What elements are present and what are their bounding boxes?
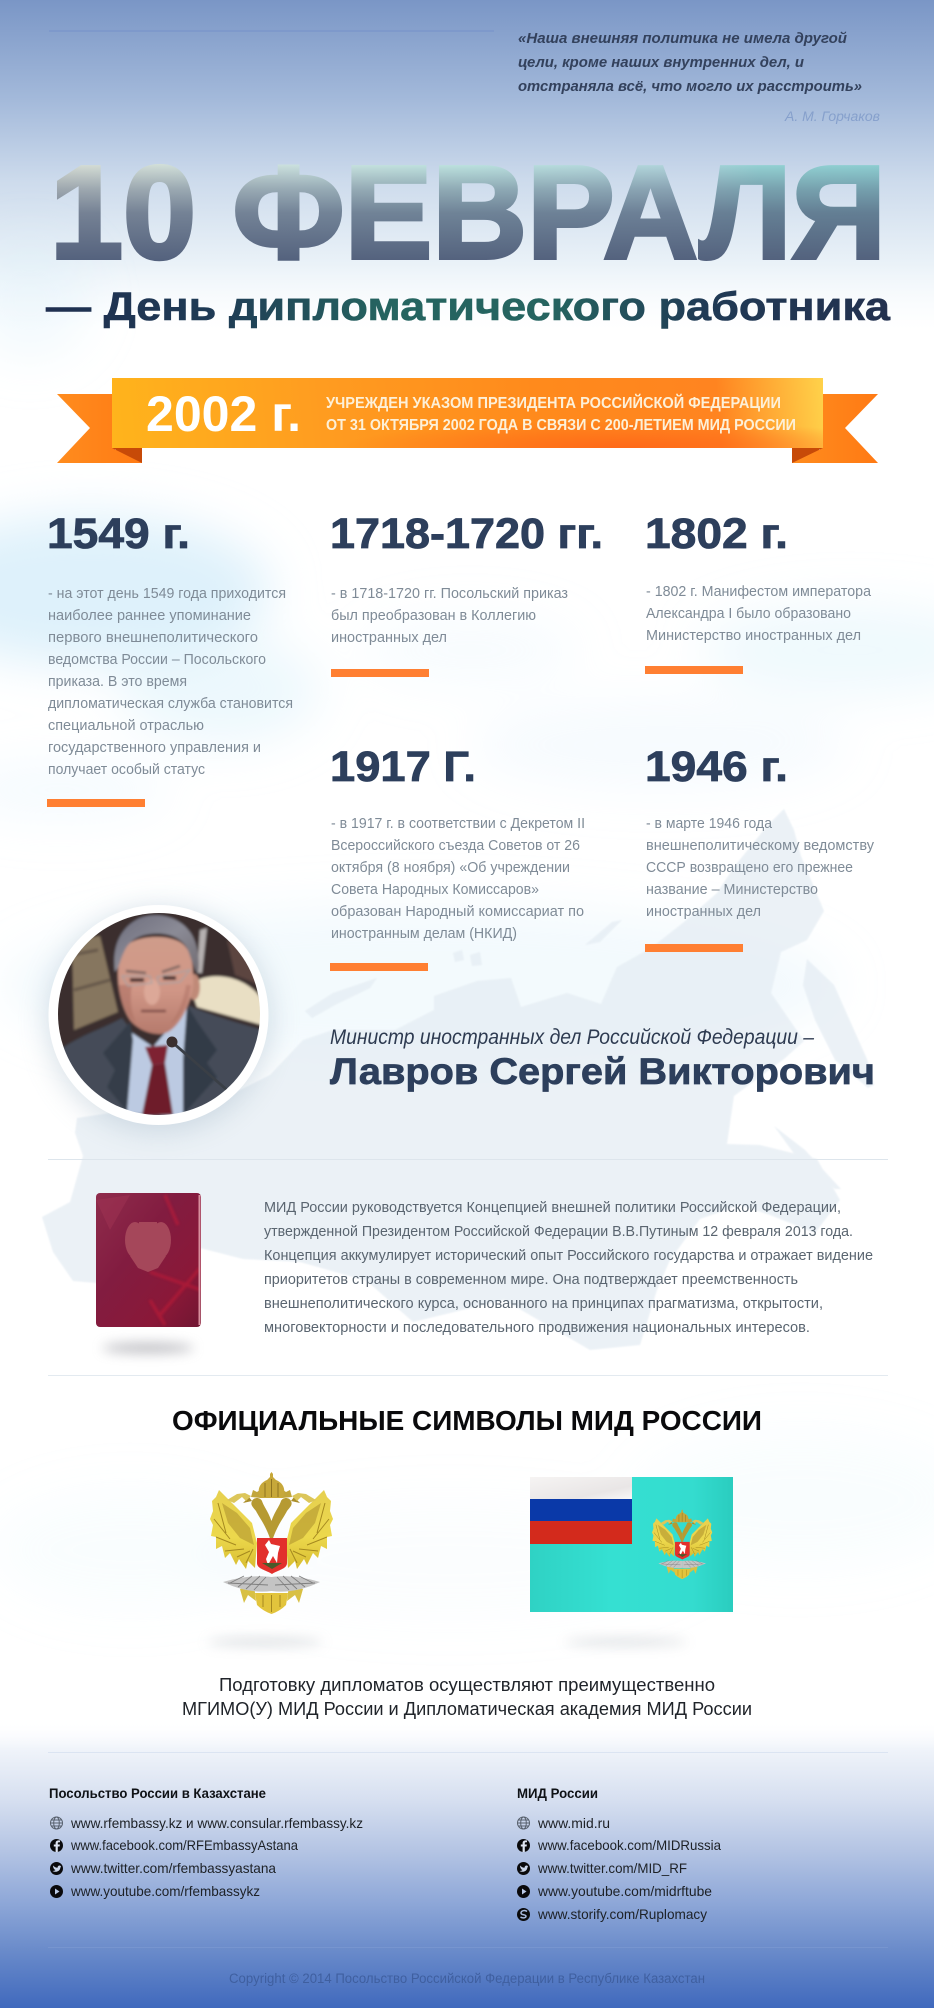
title: 10 ФЕВРАЛЯ: [50, 139, 886, 286]
diplomats note: МГИМО(У) МИД России и Дипломатическая академия МИД России: [182, 1699, 752, 1719]
quote: отстраняла всё, что могло их расстроить»: [518, 79, 862, 95]
diplomats note: Подготовку дипломатов осуществляют преимущественно: [219, 1675, 715, 1695]
timeline: 1549: приказа. В это время: [48, 674, 187, 690]
timeline: 1917: - в 1917 г. в соответствии с Декретом II: [331, 816, 585, 832]
minister name: Лавров Сергей Викторович: [330, 1051, 875, 1092]
background: map of Russia: [42, 809, 874, 1350]
footer column: ministry: www.mid.ru: [537, 1816, 610, 1831]
timeline: 1549: 1549 г.: [47, 510, 190, 558]
timeline: 1946: название – Министерство: [646, 882, 818, 898]
timeline: 1946: 1946 г.: [645, 743, 788, 791]
timeline: 1718-1720: [330, 510, 603, 677]
timeline: 1917: иностранным делам (НКИД): [331, 926, 517, 942]
icon: storify: [517, 1908, 530, 1921]
timeline: 1917: Всероссийского съезда Советов от 26: [331, 838, 580, 854]
quote: [518, 31, 862, 95]
timeline: 1718-1720: 1718-1720 гг.: [330, 510, 603, 558]
icon: youtube: [50, 1885, 63, 1898]
flag of the ministry: [530, 1477, 733, 1646]
timeline: 1549: - на этот день 1549 года приходится: [48, 586, 286, 602]
timeline: 1549: первого внешнеполитического: [48, 630, 258, 646]
footer column: embassy: [49, 1786, 363, 1899]
timeline: 1549: специальной отраслью: [48, 718, 204, 734]
timeline: 1917: октября (8 ноября) «Об учреждении: [331, 860, 570, 876]
icon: globe: [50, 1817, 62, 1829]
subtitle: — День дипломатического работника: [46, 285, 891, 329]
ribbon text: УЧРЕЖДЕН УКАЗОМ ПРЕЗИДЕНТА РОССИЙСКОЙ ФЕДЕРАЦИИ: [326, 393, 781, 412]
timeline: 1549: ведомства России – Посольского: [48, 652, 266, 668]
portrait of the minister: [47, 905, 271, 1132]
timeline: 1549: наиболее раннее упоминание: [48, 608, 251, 624]
ribbon banner: [57, 378, 878, 463]
timeline: 1946: внешнеполитическому ведомству: [646, 838, 875, 854]
timeline: 1946: иностранных дел: [646, 904, 761, 920]
ribbon text: ОТ 31 ОКТЯБРЯ 2002 ГОДА В СВЯЗИ С 200-ЛЕТИЕМ МИД РОССИИ: [326, 417, 796, 434]
timeline: 1802: Министерство иностранных дел: [646, 628, 861, 644]
timeline: 1946: СССР возвращено его прежнее: [646, 860, 853, 876]
quote: цели, кроме наших внутренних дел, и: [518, 55, 804, 71]
diplomats note: [182, 1675, 752, 1719]
footer column: embassy: www.youtube.com/rfembassykz: [70, 1884, 260, 1899]
footer column: ministry: www.facebook.com/MIDRussia: [537, 1838, 721, 1853]
icon: concept book: [96, 1193, 201, 1353]
timeline: 1946: - в марте 1946 года: [646, 816, 773, 832]
timeline: 1549: [47, 510, 293, 807]
timeline: 1802: [645, 510, 872, 674]
concept paragraph: утвержденной Президентом Российской Федерации В.В.Путиным 12 февраля 2013 года.: [264, 1224, 853, 1240]
footer column: ministry: www.youtube.com/midrftube: [537, 1884, 712, 1899]
timeline: 1549: получает особый статус: [48, 762, 205, 778]
timeline: 1917: Совета Народных Комиссаров»: [331, 882, 539, 898]
concept paragraph: многовекторности и последовательного продвижения национальных интересов.: [264, 1320, 810, 1336]
minister caption: [330, 1026, 875, 1092]
footer column: embassy: www.rfembassy.kz и www.consular.rfembassy.kz: [70, 1816, 363, 1831]
footer column: ministry: [517, 1786, 721, 1922]
timeline: 1549: государственного управления и: [48, 740, 261, 756]
copyright: Copyright © 2014 Посольство Российской Федерации в Республике Казахстан: [229, 1971, 705, 1986]
timeline: 1946: [645, 743, 875, 952]
concept paragraph: внешнеполитического курса, основанного на принципах прагматизма, открытости,: [264, 1296, 823, 1312]
icon: coat of arms: [207, 1472, 333, 1646]
top rule: [49, 30, 494, 32]
timeline: 1802: 1802 г.: [645, 510, 788, 558]
minister caption: Министр иностранных дел Российской Федерации –: [330, 1026, 814, 1049]
icon: twitter: [50, 1862, 63, 1875]
timeline: 1917: образован Народный комиссариат по: [331, 904, 584, 920]
timeline: 1802: - 1802 г. Манифестом императора: [646, 584, 872, 600]
icon: twitter: [517, 1862, 530, 1875]
timeline: 1802: Александра I было образовано: [646, 606, 851, 622]
background: bottom gradient: [0, 1720, 934, 2008]
footer column: embassy: www.facebook.com/RFEmbassyAstana: [70, 1838, 298, 1853]
icon: globe: [518, 1817, 530, 1829]
timeline: 1549: дипломатическая служба становится: [48, 696, 293, 712]
timeline: 1718-1720: был преобразован в Коллегию: [331, 608, 536, 624]
timeline: 1917: 1917 Г.: [330, 743, 476, 791]
concept paragraph: [264, 1200, 873, 1336]
symbols heading: ОФИЦИАЛЬНЫЕ СИМВОЛЫ МИД РОССИИ: [172, 1405, 762, 1436]
footer column: ministry: www.storify.com/Ruplomacy: [537, 1907, 707, 1922]
ribbon year: 2002 г.: [146, 386, 301, 442]
footer column: embassy: www.twitter.com/rfembassyastana: [70, 1861, 276, 1876]
icon: facebook: [517, 1839, 530, 1852]
footer column: ministry: www.twitter.com/MID_RF: [537, 1861, 687, 1876]
concept paragraph: Концепция аккумулирует исторический опыт Российского государства и отражает видение: [264, 1248, 873, 1264]
quote: «Наша внешняя политика не имела другой: [518, 31, 847, 47]
ribbon text: [326, 393, 796, 434]
timeline: 1917: [330, 743, 585, 971]
concept paragraph: приоритетов страны в современном мире. Она подтверждает преемственность: [264, 1272, 798, 1288]
footer column: ministry: МИД России: [517, 1786, 598, 1801]
icon: facebook: [50, 1839, 63, 1852]
timeline: 1718-1720: иностранных дел: [331, 630, 447, 646]
timeline: 1718-1720: - в 1718-1720 гг. Посольский приказ: [331, 586, 568, 602]
concept paragraph: МИД России руководствуется Концепцией внешней политики Российской Федерации,: [264, 1200, 841, 1216]
quote author: А. М. Горчаков: [784, 109, 880, 124]
icon: youtube: [517, 1885, 530, 1898]
footer column: embassy: Посольство России в Казахстане: [49, 1786, 266, 1801]
